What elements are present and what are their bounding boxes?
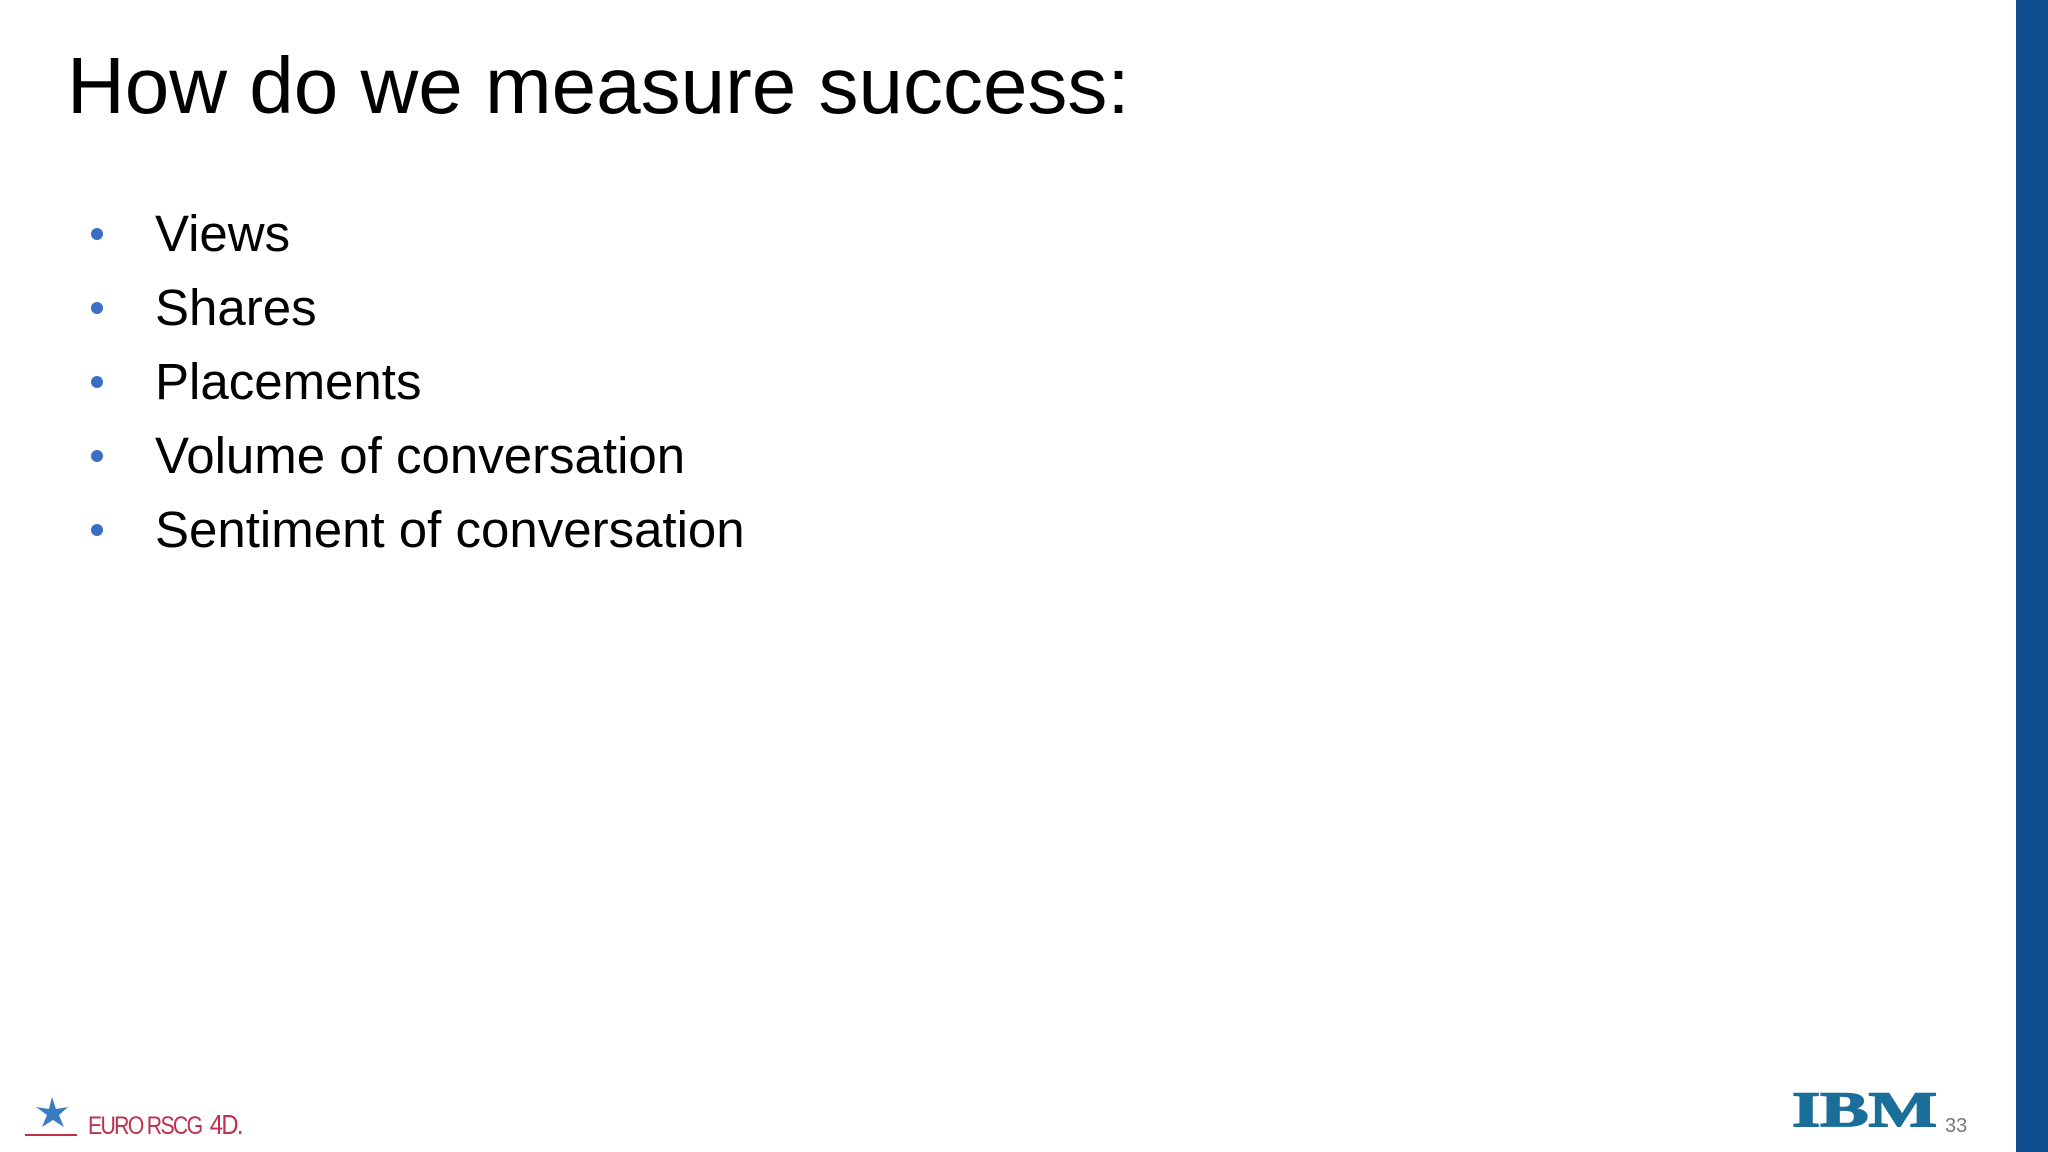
bullet list: Views [155,205,290,262]
bullet list: Shares [155,279,317,336]
bullet: volume [91,427,685,484]
bullet list: Sentiment of conversation [155,501,745,558]
bullet list [91,205,745,558]
bullet list: Volume of conversation [155,427,685,484]
title: How do we measure success: [67,41,1130,130]
bullet: placements [91,353,421,410]
bullet: shares [91,279,317,336]
logo: Euro RSCG 4D: EURO RSCG 4D. [88,1109,242,1140]
right blue bar [2016,0,2048,1152]
logo: Euro RSCG 4D [25,1097,242,1140]
bullet list: Placements [155,353,421,410]
page number: 33 [1945,1115,1967,1137]
bullet: sentiment [91,501,745,558]
logo: IBM: IBM [1792,1081,1937,1137]
bullet: views [91,205,290,262]
